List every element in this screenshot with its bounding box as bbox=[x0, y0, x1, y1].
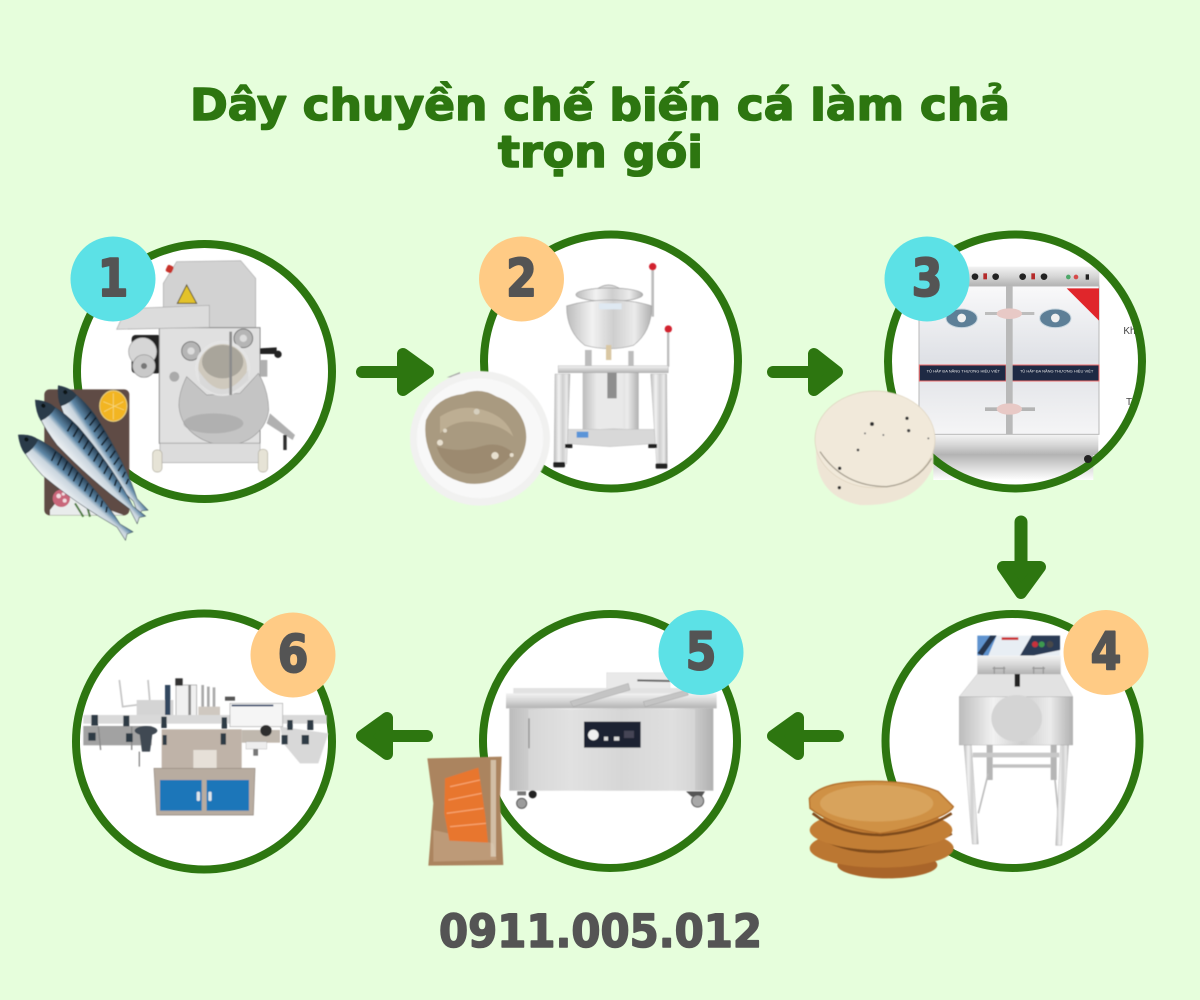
machine: labeling line bbox=[83, 678, 328, 815]
arrow: step 1 to 2 bbox=[362, 354, 428, 390]
machine: steam cabinet: Kh bbox=[1123, 326, 1136, 337]
title: Dây chuyền chế biến cá làm chả bbox=[190, 80, 1010, 131]
arrow: step 5 to 6 bbox=[362, 718, 427, 754]
badge: number 5 bbox=[658, 610, 744, 695]
circle: step 1 frame bbox=[77, 244, 332, 499]
wheel of steam cabinet bbox=[1084, 455, 1092, 463]
badge: number 5: 5 bbox=[686, 622, 716, 682]
badge: number 3: 3 bbox=[912, 249, 942, 309]
illustration: vacuum packed salmon bbox=[427, 757, 503, 866]
illustration: fried fish cakes bbox=[809, 781, 954, 878]
title: trọn gói bbox=[498, 127, 703, 178]
machine: fish bone separator bbox=[117, 261, 295, 472]
badge: number 3 bbox=[884, 236, 970, 322]
arrow: step 3 to 4 bbox=[1003, 522, 1040, 593]
badge: number 1: 1 bbox=[98, 249, 128, 309]
title bbox=[190, 80, 1010, 178]
phone number: 0911.005.012 bbox=[439, 905, 762, 958]
circle: step 3 frame bbox=[888, 234, 1142, 488]
badge: number 6: 6 bbox=[278, 625, 308, 685]
circle: step 2 frame bbox=[484, 234, 738, 488]
circle: step 3 fill bbox=[888, 234, 1142, 488]
illustration: steamed fish cakes bbox=[815, 391, 935, 505]
circle: step 6 frame bbox=[76, 614, 332, 870]
badge: number 2 bbox=[479, 236, 564, 322]
arrow: step 4 to 5 bbox=[773, 718, 838, 754]
panel: step 1 bbox=[9, 236, 332, 545]
panel: step 6 bbox=[76, 612, 336, 870]
badge: number 1 bbox=[70, 236, 156, 322]
illustration: mackerel on a board bbox=[9, 378, 156, 545]
machine: steam cabinet bbox=[918, 267, 1136, 480]
panel: step 2 bbox=[410, 234, 738, 506]
panel: step 5 bbox=[427, 610, 744, 868]
machine: steam cabinet: TỦ HẤP ĐA NĂNG THƯƠNG HIỆU VIỆT bbox=[1020, 368, 1094, 373]
badge: number 4 bbox=[1064, 610, 1148, 695]
panel: step 4 bbox=[809, 610, 1148, 878]
badge: number 6 bbox=[250, 612, 336, 698]
circle: step 4 frame bbox=[886, 614, 1140, 868]
machine: meat grinder bbox=[553, 263, 672, 469]
badge: number 4: 4 bbox=[1091, 622, 1121, 682]
machine: steam cabinet: TỦ HẤP ĐA NĂNG THƯƠNG HIỆU VIỆT bbox=[927, 368, 1001, 373]
illustration: fish paste bowl bbox=[410, 371, 550, 506]
badge: number 2: 2 bbox=[506, 249, 537, 309]
machine: steam cabinet: T bbox=[1126, 397, 1132, 408]
machine: vacuum sealer bbox=[506, 673, 717, 808]
arrow: step 2 to 3 bbox=[773, 354, 837, 390]
panel: step 3 bbox=[815, 234, 1142, 505]
machine: deep fryer bbox=[959, 636, 1073, 845]
circle: step 5 frame bbox=[483, 614, 737, 868]
